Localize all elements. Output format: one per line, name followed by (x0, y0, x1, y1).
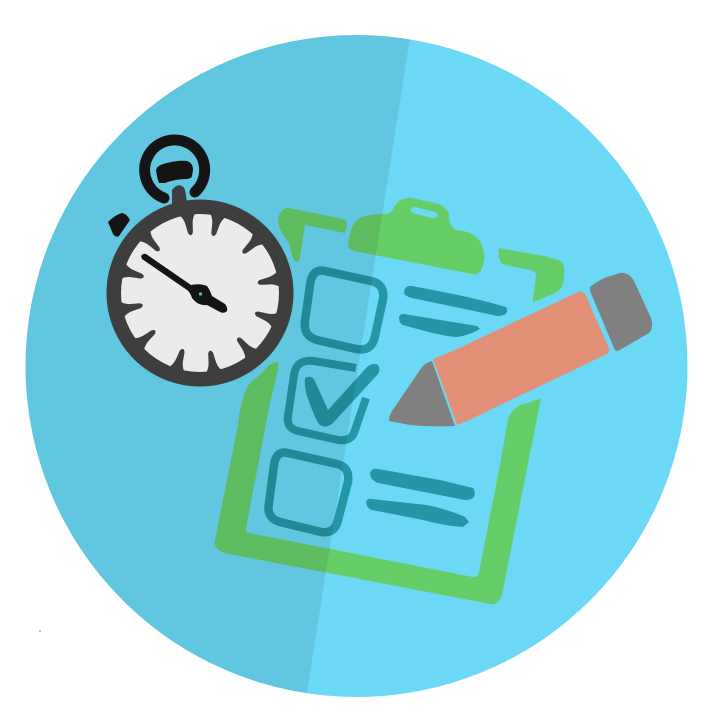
side button (108, 213, 130, 237)
clock hands (141, 254, 227, 313)
dial face (121, 214, 279, 372)
check mark (305, 364, 380, 427)
stopwatch (106, 140, 294, 386)
bow ring (145, 140, 205, 198)
hand pivot (199, 292, 202, 296)
clipboard bottom frame (215, 362, 541, 604)
checkbox 1 (305, 271, 383, 349)
crown button (156, 161, 193, 183)
stem (172, 185, 187, 207)
hour ticks (120, 213, 280, 373)
text line 1 (404, 286, 507, 316)
pencil tip (389, 361, 455, 426)
speck (39, 630, 41, 632)
shaded left half (26, 35, 410, 693)
clipboard top-left corner (278, 208, 347, 262)
pencil eraser (590, 273, 652, 351)
checkbox 2 (288, 361, 366, 440)
checklist (268, 271, 507, 532)
clipboard top-right corner (499, 248, 564, 302)
text line 3 (370, 469, 475, 500)
clipboard (215, 198, 564, 604)
text line 2 (399, 314, 480, 337)
checkbox 3 (268, 452, 348, 532)
pencil body (433, 292, 609, 425)
pencil (389, 273, 652, 426)
case (106, 200, 294, 386)
text line 4 (366, 499, 469, 527)
clipboard clip (348, 198, 484, 274)
